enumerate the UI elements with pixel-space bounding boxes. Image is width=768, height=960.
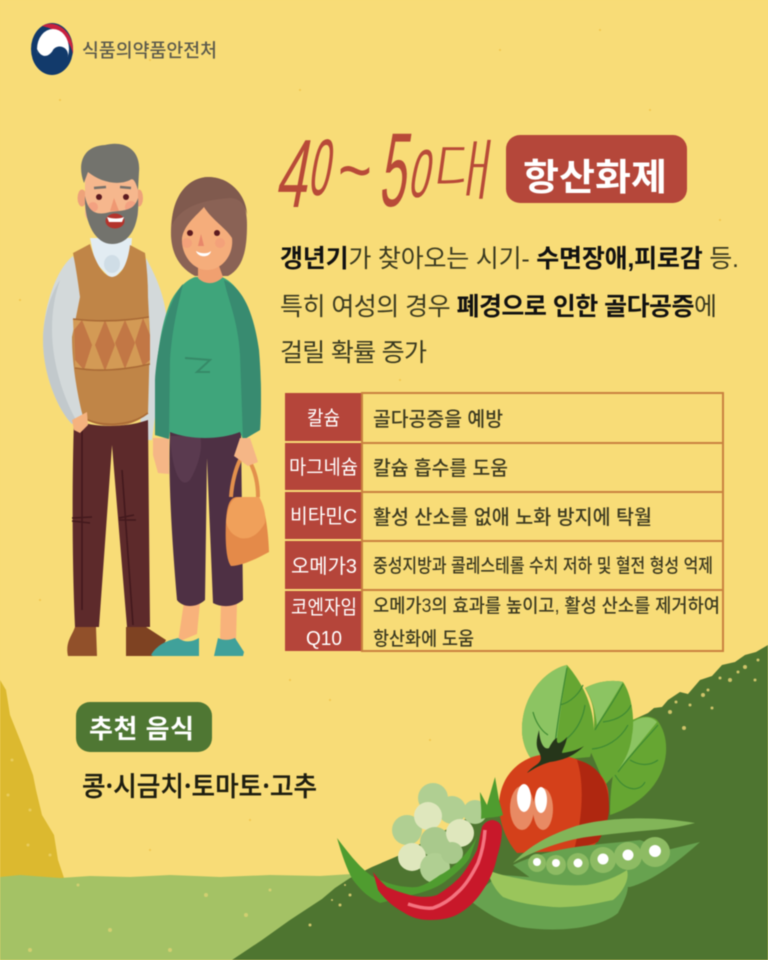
intro line 1: 갱년기가 찾아오는 시기- 수면장애,피로감 등.: [280, 245, 739, 273]
illustration: older couple: [43, 144, 269, 656]
badge: 추천 음식: [76, 702, 212, 752]
woman: [151, 177, 269, 656]
man: hair: [81, 144, 139, 190]
row: 비타민C: 활성 산소를 없애 노화 방지에 탁월: [373, 506, 652, 529]
title: 40~50대 handwritten: 5: [375, 112, 419, 229]
badge: 항산화제: [506, 135, 687, 203]
row: 칼슘: [307, 407, 503, 431]
row: 마그네슘: 마그네슘: [289, 456, 358, 479]
row: 코엔자임 Q10: 코엔자임: [291, 596, 357, 619]
tomato: [499, 730, 609, 853]
man: [43, 144, 167, 656]
beans: [392, 783, 487, 883]
woman: trousers: [169, 432, 243, 606]
title: 40~50대 handwritten: 0: [404, 136, 440, 212]
intro text block: [280, 245, 739, 367]
intro line 2: 특히 여성의 경우 폐경으로 인한 골다공증에: [280, 293, 717, 321]
red chili: [373, 777, 503, 920]
man: vest: [72, 244, 150, 426]
background: light green ground band: [0, 874, 352, 960]
row: 코엔자임 Q10: Q10: [306, 628, 342, 650]
intro line 3: 걸릴 확률 증가: [280, 339, 427, 367]
badge: 추천 음식: 추천 음식: [89, 714, 194, 744]
woman: shoes: [151, 638, 199, 656]
spinach leaves: [522, 665, 666, 815]
man: shoes: [67, 627, 97, 656]
row: 오메가3: 중성지방과 콜레스테롤 수치 저하 및 혈전 형성 억제: [373, 555, 713, 577]
man: hand: [72, 412, 88, 433]
logo: government emblem and agency name: [31, 23, 217, 75]
row: 코엔자임 Q10: 오메가3의 효과를 높이고, 활성 산소를 제거하여: [373, 595, 720, 617]
background: yellow textured hill left: [0, 680, 64, 878]
illustration: vegetables: [337, 665, 700, 929]
pea pods: [472, 818, 700, 929]
man: beard: [85, 196, 138, 244]
row: 코엔자임 Q10: [291, 595, 720, 650]
man: ears, face: [78, 190, 86, 206]
row: 칼슘: 칼슘: [307, 407, 340, 430]
icon: taegeuk emblem: [31, 23, 73, 75]
title: 40~50대 handwritten: 0: [304, 124, 340, 213]
table grid lines: [362, 393, 723, 651]
green chili: [337, 837, 477, 903]
title: 40~50대 handwritten: 대: [427, 118, 501, 214]
table: antioxidant nutrients: [285, 393, 723, 651]
badge: 항산화제: 항산화제: [523, 157, 667, 198]
row: 비타민C: [290, 505, 652, 529]
man: diamond pattern: [73, 317, 150, 370]
title: 40~50대 handwritten: [270, 112, 501, 229]
man: eyes, nose: [96, 194, 102, 200]
agency name: 식품의약품안전처: [82, 40, 217, 61]
title: 40~50대 handwritten: 4: [270, 120, 321, 229]
table left label column: [285, 393, 362, 651]
recommended foods text: 콩·시금치·토마토·고추: [82, 765, 317, 804]
woman: right hand: [234, 438, 258, 466]
row: 마그네슘: 칼슘 흡수를 도움: [373, 457, 508, 480]
woman: left hand: [153, 438, 169, 474]
row: 오메가3: 오메가3: [291, 555, 357, 578]
row: 오메가3: [291, 555, 713, 578]
man: shirt collar: [90, 238, 132, 280]
man: sleeves: [43, 256, 90, 424]
woman: hair: [171, 177, 247, 276]
background: dark green diagonal hill: [232, 645, 768, 960]
title: 40~50대 handwritten: ~: [338, 129, 372, 213]
woman: face: [198, 263, 223, 283]
man: trousers: [73, 420, 150, 627]
woman: eyes, mouth: [187, 230, 193, 236]
row: 마그네슘: [289, 456, 508, 480]
woman: sweater: [155, 277, 261, 440]
row: 비타민C: 비타민C: [290, 505, 357, 528]
woman: bag: [226, 460, 269, 566]
row: 칼슘: 골다공증을 예방: [373, 408, 503, 431]
row: 코엔자임 Q10: 항산화에 도움: [373, 628, 474, 650]
woman: legs: [178, 602, 237, 642]
